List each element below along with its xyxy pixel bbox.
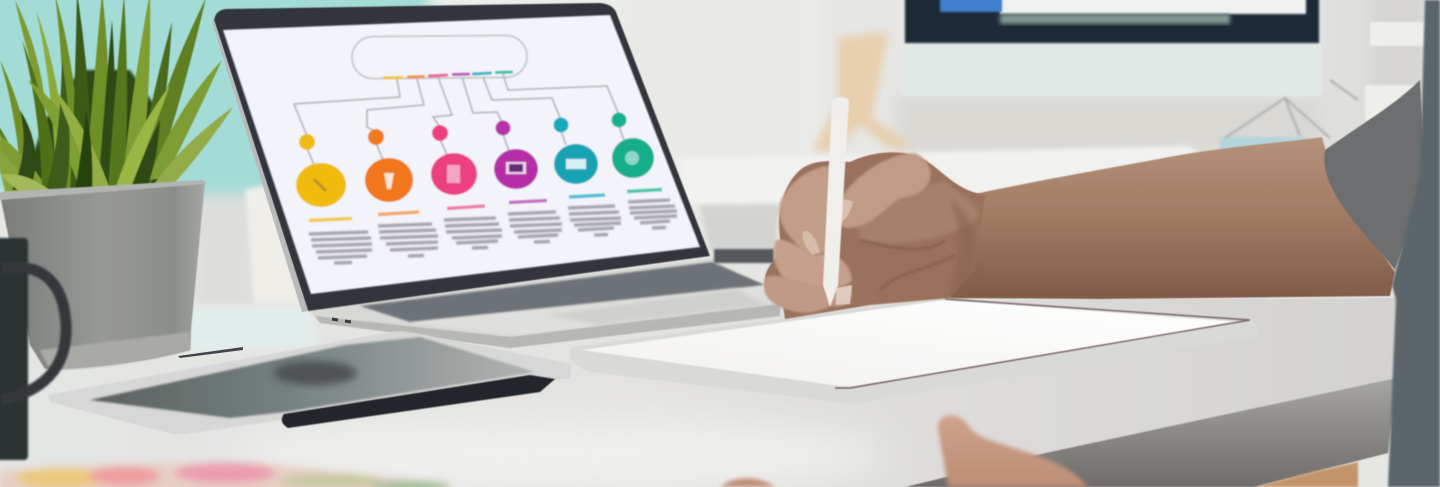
palm silhouette	[765, 152, 985, 319]
tablet hand shadow	[273, 361, 357, 385]
tablet silver body	[569, 298, 1257, 403]
arm	[950, 137, 1395, 299]
laptop base and keyboard	[308, 249, 780, 348]
white tablet	[569, 298, 1257, 403]
laptop ports	[332, 319, 351, 322]
connector lines	[294, 74, 624, 165]
index finger	[780, 165, 838, 255]
thumb nail	[833, 200, 853, 222]
hand holding pencil	[764, 152, 985, 319]
node: yellow	[296, 134, 346, 207]
label bars	[309, 190, 662, 220]
desk surface	[0, 298, 1397, 487]
central capsule	[352, 35, 527, 79]
node: green	[612, 112, 654, 178]
ring finger	[764, 276, 852, 313]
node: purple	[494, 120, 538, 189]
graphics drawing tablet	[48, 331, 572, 434]
tablet screen	[582, 300, 1240, 386]
thumb	[833, 153, 931, 228]
laptop	[212, 3, 780, 348]
tablet slot	[178, 347, 243, 358]
desk front edge	[905, 378, 1396, 487]
stylus pen	[282, 375, 555, 428]
node: orange	[365, 129, 413, 202]
finger creases	[860, 240, 955, 290]
node: pink	[431, 125, 477, 195]
foreground colour swatches	[0, 462, 450, 487]
back of hand highlight	[855, 180, 980, 243]
capsule colour segments	[383, 72, 513, 78]
laptop lid	[214, 3, 710, 311]
node: teal	[554, 118, 598, 184]
tablet dark edge	[835, 299, 1250, 388]
pot rim	[0, 180, 205, 200]
torso in blue-grey shirt	[1388, 0, 1440, 487]
middle finger	[774, 240, 852, 287]
coffee mug	[0, 238, 66, 460]
potted plant	[0, 0, 233, 370]
grey t-shirt sleeve	[1324, 80, 1425, 270]
placeholder text blocks	[309, 200, 677, 263]
laptop screen	[223, 15, 700, 294]
wooden desk leg	[1255, 453, 1388, 487]
lid silver edge	[212, 20, 308, 312]
metal pot	[0, 181, 205, 369]
background furniture: chair, side desk and easel	[245, 32, 1305, 305]
pot shadow	[40, 332, 190, 370]
little finger nail	[836, 285, 852, 305]
index finger nail	[802, 231, 820, 255]
foreground blurred hand	[720, 415, 1088, 487]
wrist shading	[948, 200, 976, 298]
plant foliage	[0, 0, 233, 192]
white pencil	[823, 97, 849, 307]
background monitor	[900, 0, 1426, 138]
